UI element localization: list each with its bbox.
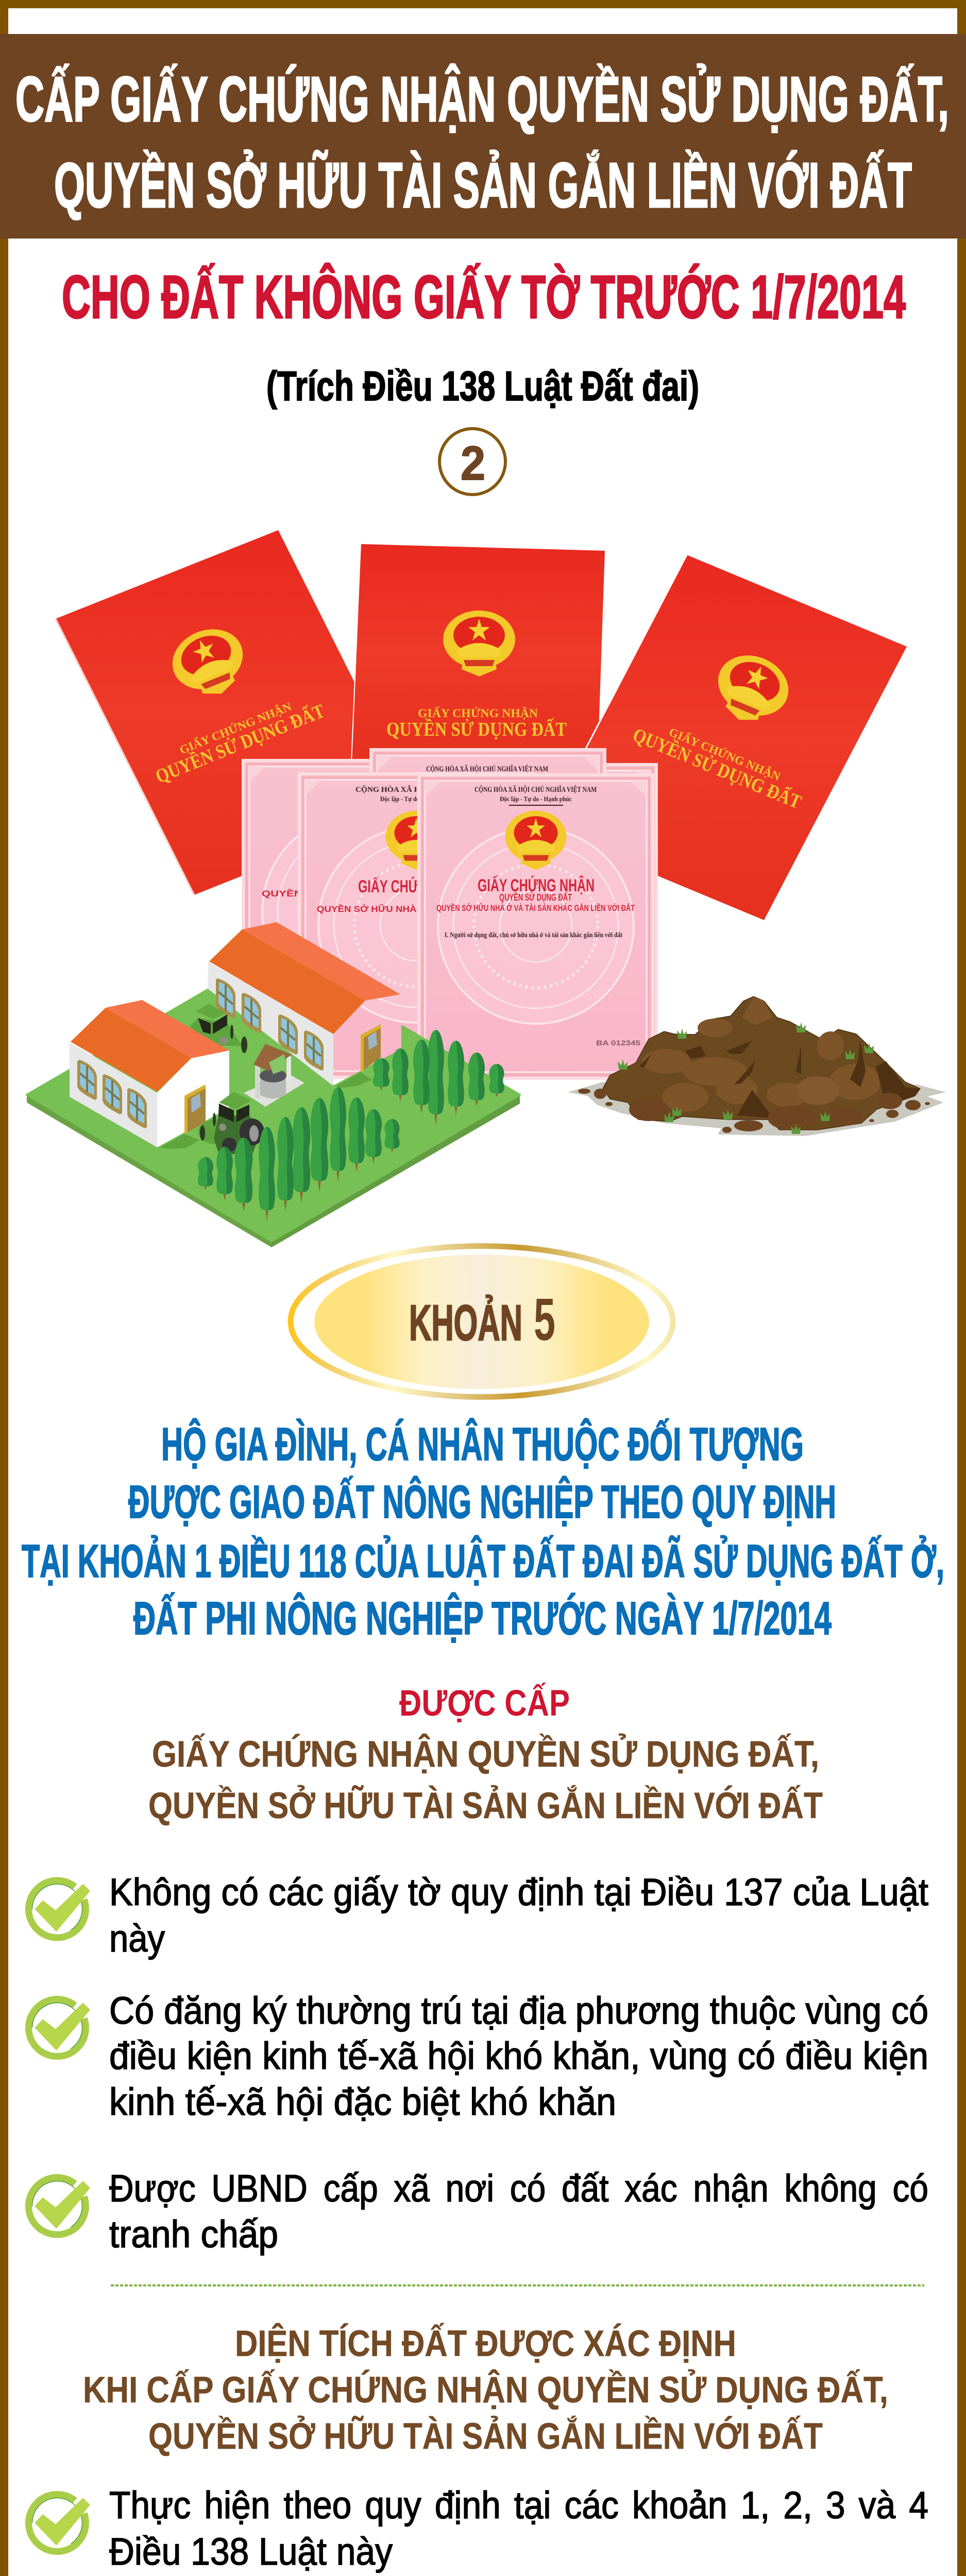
pink card front: QUYỀN SỞ HỮU NHÀ Ở VÀ TÀI SẢN KHÁC GẮN LIỀN VỚI ĐẤT: [436, 903, 635, 913]
pink card middle: Độc lập - Tự do - Hạnh phúc: [380, 795, 452, 803]
badge: khoan 5: [291, 1246, 673, 1397]
check item 3: [28, 2167, 928, 2256]
icon: check: [28, 1880, 89, 1938]
check item 3: tranh chấp: [109, 2213, 278, 2256]
red book right: GIẤY CHỨNG NHẬN: [667, 725, 783, 783]
check item 1: này: [109, 1917, 165, 1960]
check item 2: [28, 1989, 928, 2123]
heading: land area: QUYỀN SỞ HỮU TÀI SẢN GẮN LIỀN VỚI ĐẤT: [148, 2416, 823, 2457]
pink card middle: CỘNG HÒA XÃ HỘI CHỦ NGHĨA: [355, 785, 478, 794]
red book right: QUYỀN SỬ DỤNG ĐẤT: [630, 723, 805, 814]
red book left: QUYỀN SỬ DỤNG ĐẤT: [152, 700, 328, 788]
pink card front: I. Người sử dụng đất, chủ sở hữu nhà ở và tài sản khác gắn liền với đất: [445, 931, 622, 939]
heading: duoc cap: GIẤY CHỨNG NHẬN QUYỀN SỬ DỤNG ĐẤT,: [152, 1734, 819, 1775]
heading: duoc cap: [148, 1683, 823, 1826]
pink card back left: [242, 759, 479, 1065]
trees front row: [198, 1087, 400, 1222]
heading: khoan 5 subject: [22, 1418, 944, 1645]
shadows on land: [160, 1072, 372, 1149]
illustration: pink certificates: [242, 748, 658, 1080]
icon: check: [28, 2494, 89, 2551]
pink card back top: [369, 748, 606, 1055]
pink card front: QUYỀN SỬ DỤNG ĐẤT: [499, 892, 572, 903]
check item 4: Điều 138 Luật này: [109, 2530, 393, 2573]
pink card front: Độc lập - Tự do - Hạnh phúc: [500, 795, 572, 803]
red book right: [544, 555, 907, 920]
icon: check: [28, 2177, 89, 2234]
red book left: GIẤY CHỨNG NHẬN: [178, 699, 294, 757]
badge: khoan 5: 5: [534, 1286, 555, 1353]
trees back row: [373, 1030, 504, 1126]
upper house: [208, 922, 400, 1086]
heading: land area: DIỆN TÍCH ĐẤT ĐƯỢC XÁC ĐỊNH: [235, 2323, 736, 2364]
illustration: houses on land: [27, 922, 520, 1247]
icon: check: [28, 1999, 89, 2056]
land base: [27, 1095, 520, 1247]
pink card middle: QUYỀN SỞ HỮU NHÀ Ở VÀ TÀI SẢN KHÁC: [317, 904, 515, 914]
check item 1: [28, 1871, 928, 1960]
source note: (Trích Điều 138 Luật Đất đai): [266, 363, 699, 410]
pink card front: BA 012345: [596, 1039, 640, 1047]
heading: duoc cap: ĐƯỢC CẤP: [399, 1683, 570, 1724]
soil shadow: [568, 1082, 946, 1136]
pink card middle: GIẤY CHỨNG NHẬN: [358, 877, 475, 896]
red book left: [56, 530, 417, 895]
soil mound: [603, 996, 920, 1130]
part number badge: 2: [461, 436, 485, 490]
red book center: [351, 544, 605, 762]
pink card back top: Độc lập - Tự do - Hạnh phúc: [452, 774, 524, 782]
red book center: GIẤY CHỨNG NHẬN: [418, 706, 538, 720]
check item 4: [28, 2484, 928, 2573]
red book center: QUYỀN SỬ DỤNG ĐẤT: [386, 718, 567, 740]
heading: duoc cap: QUYỀN SỞ HỮU TÀI SẢN GẮN LIỀN VỚI ĐẤT: [148, 1785, 823, 1826]
soil grass tufts: [618, 1022, 874, 1134]
check item 2: kinh tế-xã hội đặc biệt khó khăn: [109, 2080, 616, 2123]
part number badge: [439, 429, 505, 495]
lower house: [70, 1000, 229, 1147]
soil highlights: [642, 996, 881, 1112]
lower tractor: [198, 1092, 264, 1154]
check item 2: điều kiện kinh tế-xã hội khó khăn, vùng có điều kiện: [109, 2035, 928, 2077]
soil dark crevices: [639, 1041, 920, 1118]
heading: land area: [83, 2323, 888, 2457]
well: [244, 1044, 304, 1107]
title band: [0, 34, 966, 239]
badge: khoan 5: KHOẢN: [409, 1295, 522, 1351]
pink card back right: [421, 763, 658, 1070]
illustration: soil pile: [568, 996, 946, 1136]
pink card back top: CỘNG HÒA XÃ HỘI CHỦ NGHĨA VIỆT NAM: [426, 764, 548, 773]
pink card front: CỘNG HÒA XÃ HỘI CHỦ NGHĨA VIỆT NAM: [474, 785, 597, 794]
pink card front: [417, 773, 654, 1080]
pink card front: GIẤY CHỨNG NHẬN: [478, 876, 595, 895]
pink card back left: QUYỀN SỞ HỮU NHÀ Ở VÀ TÀI SẢN: [262, 888, 460, 899]
pink card middle: [298, 772, 535, 1079]
upper tractor: [190, 1004, 247, 1053]
illustration: red certificates: [56, 530, 907, 920]
soil rocks: [578, 1089, 930, 1133]
